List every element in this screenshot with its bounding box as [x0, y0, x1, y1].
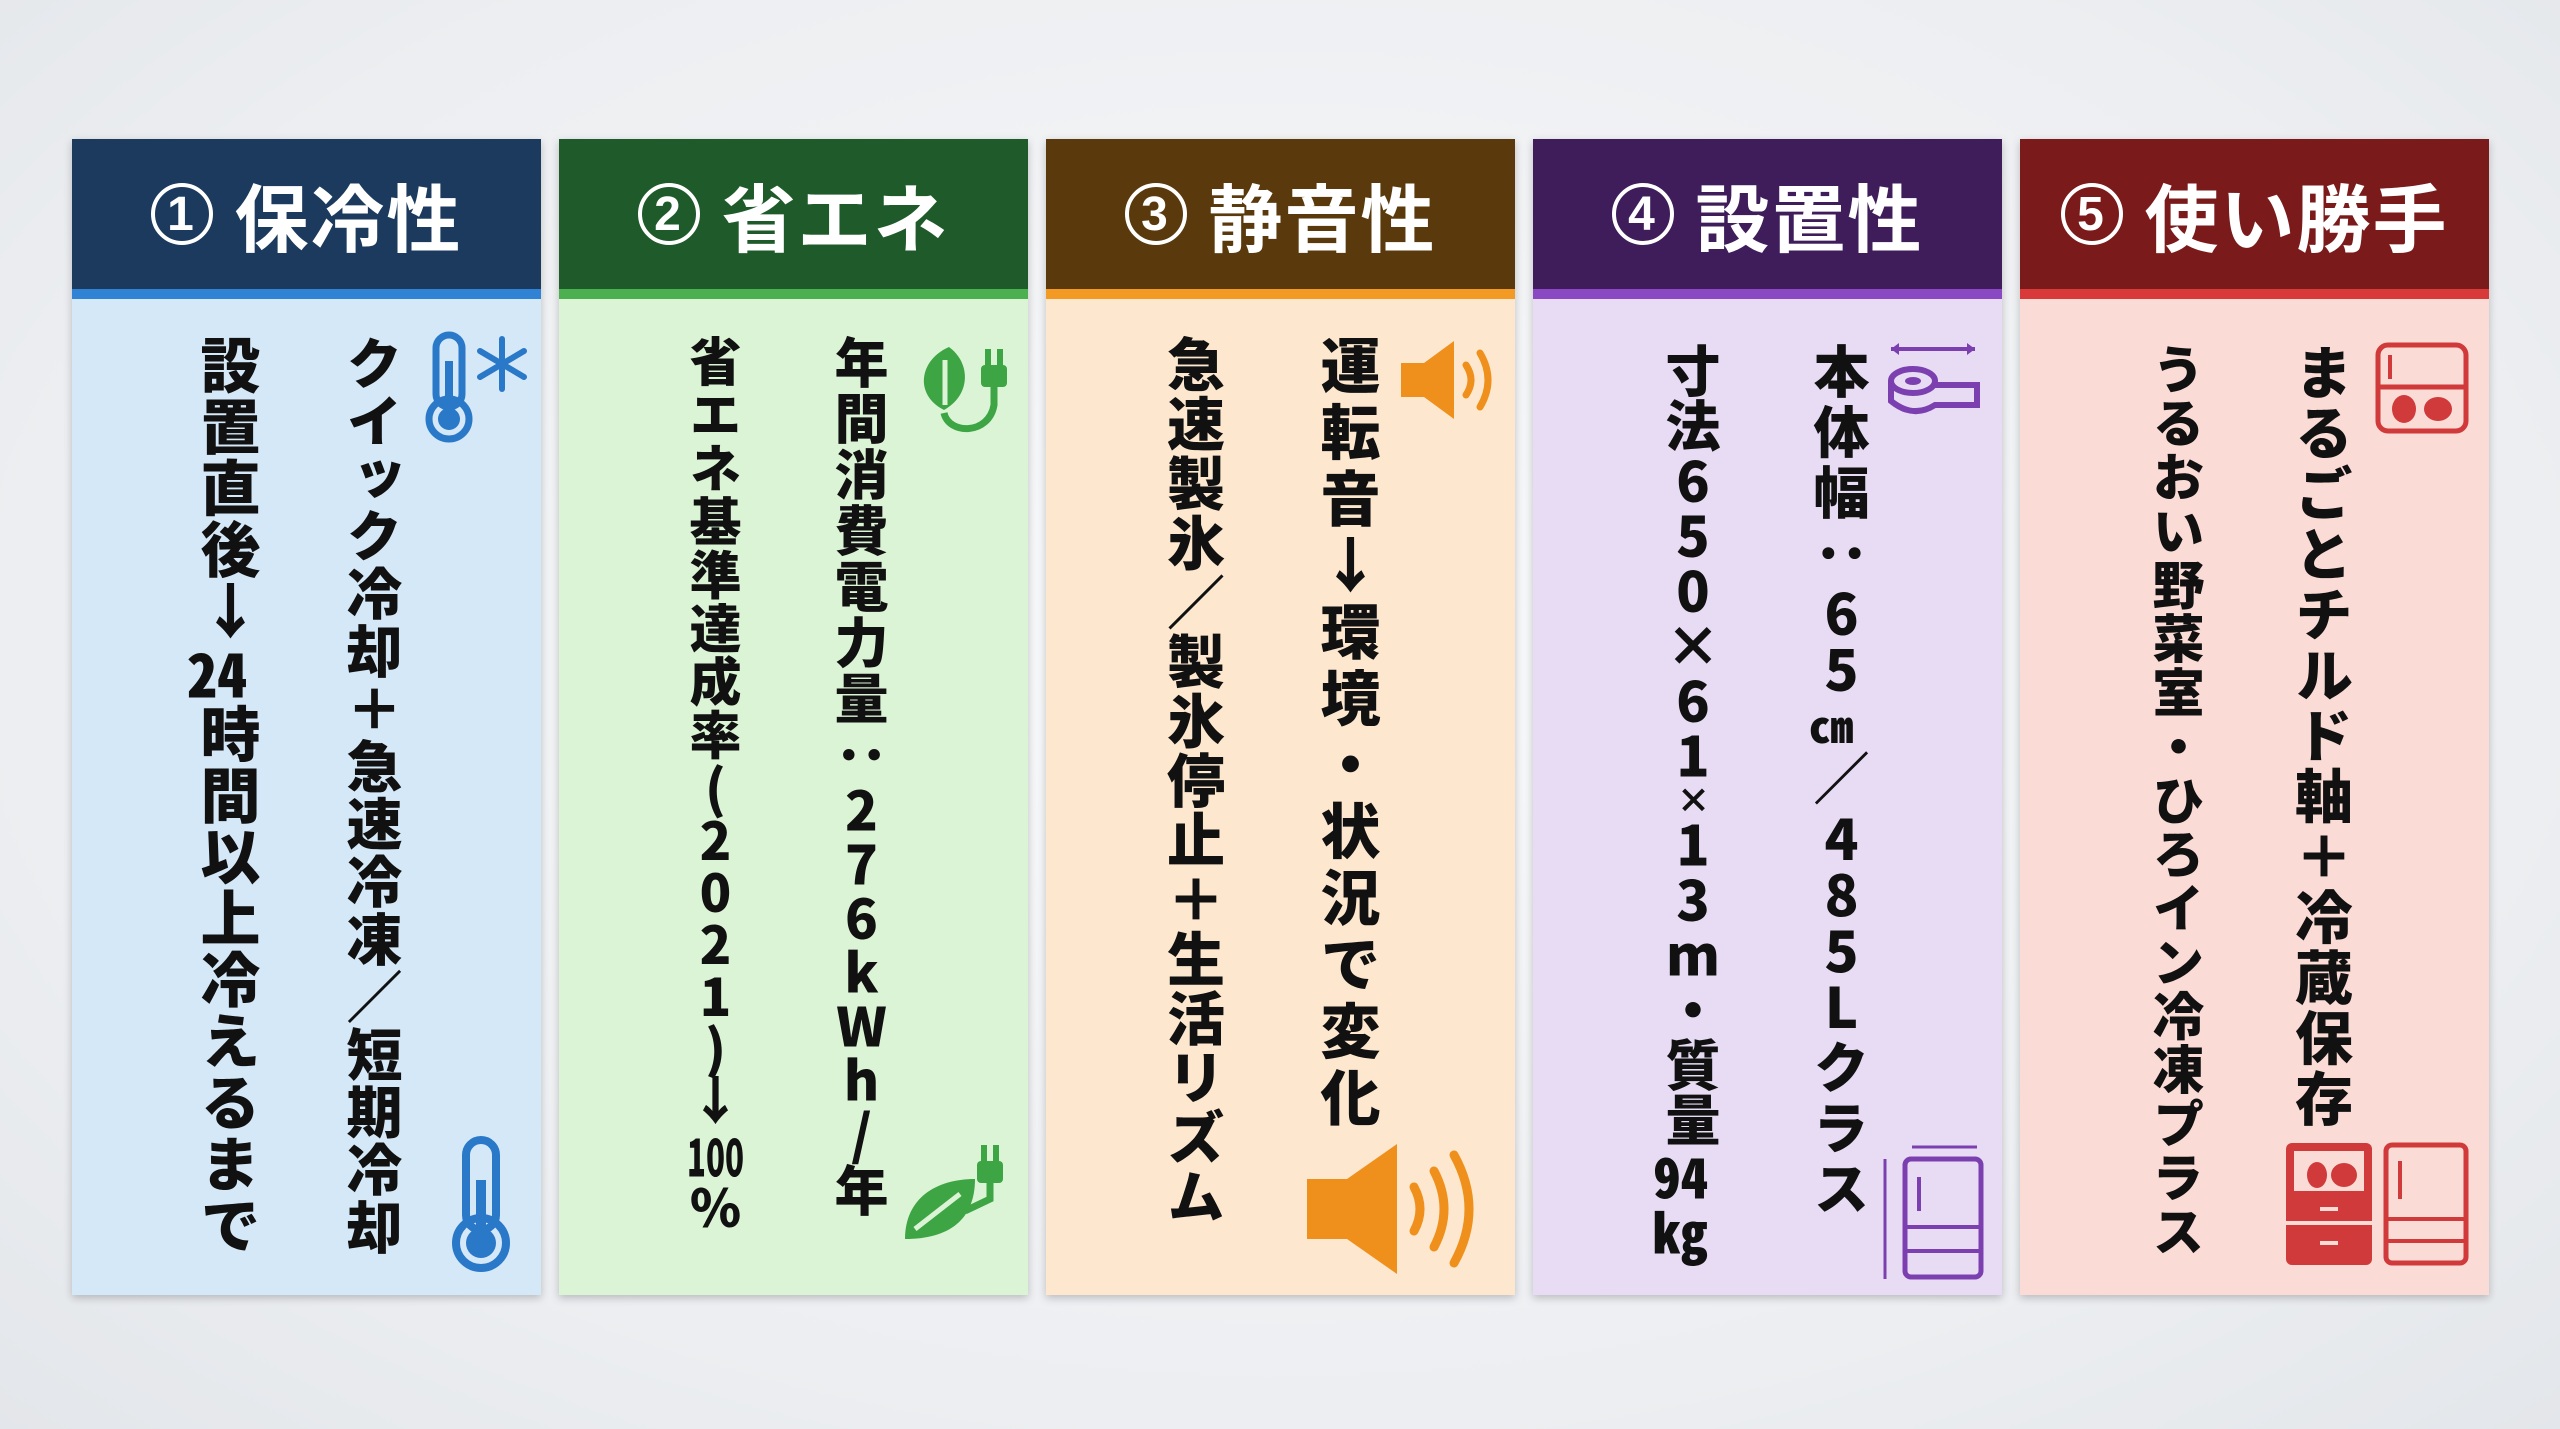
text: operating sound: 運転音↓環境・状況で変化 [1307, 335, 1394, 1127]
heading: 設置性: 4 [1628, 188, 1657, 240]
icon: leaf plug bottom [905, 1145, 1003, 1239]
text: dimensions: 寸法650×61 × 13m・質量 94 kg [1653, 343, 1733, 1257]
heading: 省エネ: 2 [654, 188, 683, 240]
icon: drawer with food [2376, 342, 2468, 434]
panel: 2 省エネ [559, 139, 1028, 1295]
panel: 3 静音性 [1046, 139, 1515, 1295]
heading: 使い勝手: 5 [2077, 188, 2106, 240]
text: achievement rate: 省エネ基準達成率(2021)↓ 100 % [678, 335, 753, 1233]
icon: fridge with dimensions [1884, 1146, 1984, 1280]
heading: 保冷性: 1 [167, 188, 196, 240]
panel: 1 保冷性 [72, 139, 541, 1295]
text: chilled: まるごとチルド軸＋冷蔵保存 [2282, 343, 2366, 1127]
icon: large speaker [1307, 1144, 1474, 1274]
heading: 設置性 [1533, 139, 2002, 289]
heading: 省エネ [559, 139, 1028, 289]
heading: 使い勝手: 使い勝手 [2144, 160, 2448, 268]
heading: 設置性: 設置性 [1696, 160, 1924, 268]
heading: 保冷性: 保冷性 [234, 160, 462, 268]
icon: leaf plug [924, 347, 1007, 432]
icon: small speaker [1401, 341, 1492, 419]
heading: 静音性: 3 [1141, 188, 1170, 240]
text: 24 hours: 設置直後↓ 24 時間以上冷えるまで [187, 335, 274, 1255]
icon: vegetable drawer and fridge [2286, 1142, 2468, 1266]
heading: 省エネ: 省エネ [722, 160, 950, 268]
icon: tape measure [1888, 343, 1980, 414]
heading: 静音性 [1046, 139, 1515, 289]
icon: thermometer with snowflake [426, 332, 527, 442]
heading: 保冷性 [72, 139, 541, 289]
text: vegetable room: うるおい野菜室・ひろイン冷凍プラス [2141, 343, 2216, 1257]
text: width: 本体幅：65 cm ／485Lクラス [1801, 343, 1882, 1216]
panel: 4 設置性 [1533, 139, 2002, 1295]
heading: 静音性: 静音性 [1208, 160, 1436, 268]
icon: thermometer [452, 1136, 510, 1272]
panel: 5 使い勝手 [2020, 139, 2489, 1295]
text: annual power: 年間消費電力量：276kWh/年 [822, 335, 901, 1217]
heading: 使い勝手 [2020, 139, 2489, 289]
text: quick cooling: クイック冷却＋急速冷凍／短期冷却 [334, 335, 415, 1255]
text: ice making: 急速製氷／製氷停止＋生活リズム [1154, 335, 1238, 1225]
